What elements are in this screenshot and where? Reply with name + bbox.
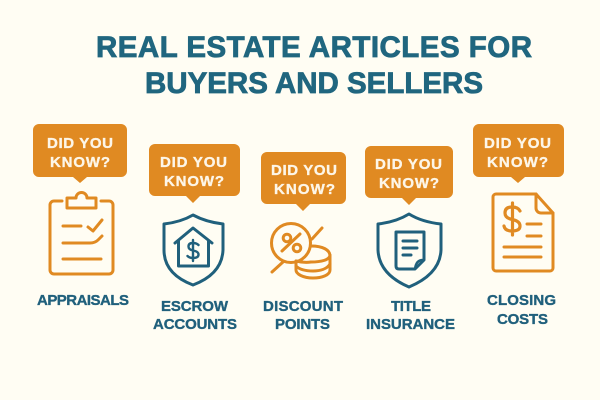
label: escrow accounts: ACCOUNTS (153, 316, 237, 333)
icon: shield with document (378, 214, 441, 287)
panel: appraisals (33, 124, 129, 309)
icon: closing cost document (493, 194, 553, 271)
callout: did you know 2: KNOW? (164, 173, 224, 190)
callout: did you know 3: KNOW? (274, 181, 335, 198)
label: discount points: DISCOUNT (263, 298, 343, 315)
callout: did you know 4: DID YOU (375, 156, 442, 173)
callout: did you know 4: KNOW? (379, 175, 439, 192)
callout: did you know 1: DID YOU (47, 135, 113, 152)
label: title insurance: TITLE (391, 298, 431, 315)
icon: clipboard (50, 192, 113, 274)
panel: closing costs (473, 124, 564, 328)
label: title insurance: INSURANCE (366, 316, 455, 333)
label: title insurance (366, 298, 455, 333)
icon: shield with house (164, 215, 223, 285)
label: discount points: POINTS (275, 316, 330, 333)
label: closing costs (487, 292, 556, 328)
callout: did you know 5: DID YOU (484, 135, 551, 152)
callout: did you know 3 (261, 152, 346, 211)
label: appraisals: APPRAISALS (37, 292, 129, 309)
callout: did you know 5: KNOW? (487, 154, 548, 171)
title: BUYERS AND SELLERS (145, 67, 483, 100)
callout: did you know 1 (33, 124, 127, 183)
callout: did you know 4 (365, 146, 453, 205)
panel: title insurance (365, 146, 455, 333)
callout: did you know 5 (473, 124, 564, 183)
label: closing costs: COSTS (497, 311, 548, 328)
callout: did you know 2: DID YOU (160, 154, 227, 171)
panel: discount points (261, 152, 346, 333)
label: discount points (263, 298, 343, 333)
title (96, 31, 532, 100)
panel: escrow accounts (149, 144, 240, 333)
callout: did you know 3: DID YOU (271, 162, 337, 179)
callout: did you know 2 (149, 144, 240, 203)
label: closing costs: CLOSING (487, 292, 556, 309)
callout: did you know 1: KNOW? (50, 154, 110, 171)
icon: percent badge and coins (272, 224, 330, 278)
label: escrow accounts (153, 298, 237, 333)
title: REAL ESTATE ARTICLES FOR (96, 31, 532, 64)
label: escrow accounts: ESCROW (161, 298, 229, 315)
